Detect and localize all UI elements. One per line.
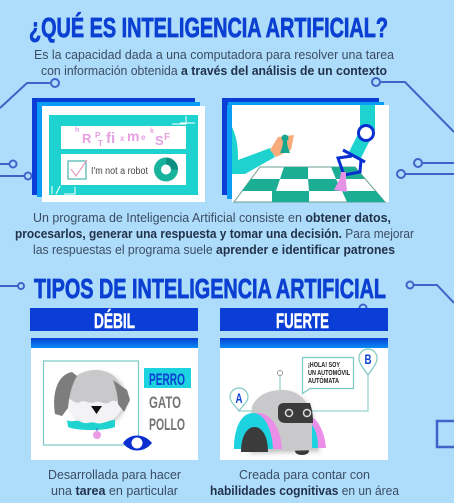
panel: dog classifier (31, 338, 198, 460)
panel: captcha (32, 98, 205, 202)
chess board (234, 167, 385, 202)
captcha text box: fi (106, 130, 115, 147)
banner: débil: DÉBIL (94, 310, 135, 333)
text: débil: Desarrollada para hacer (48, 467, 182, 482)
car (234, 390, 326, 455)
captcha text box: S (155, 133, 164, 148)
description text: Un programa de Inteligencia Artificial consiste en obtener datos, (33, 210, 391, 225)
pin B (359, 349, 377, 375)
icon: eye (123, 436, 152, 450)
captcha text box: x (120, 134, 125, 143)
captcha text box: m (127, 128, 139, 144)
captcha text box: k (150, 128, 154, 135)
panel: autonomous car (220, 338, 388, 460)
human arm with pawn (232, 127, 294, 174)
text: fuerte: Creada para contar con (239, 467, 370, 482)
speech bubble: ¡HOLA! SOY (308, 362, 340, 369)
banner: fuerte: FUERTE (276, 310, 329, 333)
intro text: con información obtenida a través del análisis de un contexto (41, 63, 387, 78)
intro text (34, 47, 395, 78)
speech bubble: UN AUTOMÓVIL (308, 368, 351, 377)
captcha text box: h (75, 127, 79, 134)
text: débil (48, 467, 182, 498)
captcha text box (61, 126, 186, 149)
intro text: Es la capacidad dada a una computadora para resolver una tarea (34, 47, 395, 62)
captcha text box: R (82, 131, 92, 146)
text: fuerte (210, 467, 400, 498)
labels: POLLO (149, 415, 185, 434)
route lines (239, 375, 368, 411)
labels: PERRO (149, 370, 185, 389)
labels: GATO (149, 393, 181, 412)
banner: fuerte (220, 308, 388, 333)
description text: las respuestas el programa suele aprender e identificar patrones (33, 242, 395, 257)
captcha text box: e (141, 133, 146, 142)
text: fuerte: habilidades cognitivas en un área (210, 483, 400, 498)
panel: chess (222, 98, 389, 202)
speech bubble (302, 358, 354, 394)
pin A: A (236, 390, 242, 406)
not a robot box (61, 154, 186, 185)
icon: dog (54, 370, 130, 439)
pin B: B (364, 351, 372, 367)
banner: débil (30, 308, 198, 333)
description text: procesarlos, generar una respuesta y tomar una decisión. Para mejorar (15, 226, 415, 241)
not a robot box: I'm not a robot (91, 165, 148, 177)
robot arm with pawn (334, 105, 375, 192)
pin A (230, 388, 248, 411)
circuit lines: decoration (0, 78, 454, 447)
captcha text box: T (98, 139, 103, 148)
labels (144, 368, 191, 434)
speech bubble: AUTÓMATA (308, 376, 339, 385)
captcha text box: F (164, 132, 170, 143)
captcha text box: P (95, 131, 101, 140)
text: débil: una tarea en particular (51, 483, 179, 498)
description text (15, 210, 415, 257)
